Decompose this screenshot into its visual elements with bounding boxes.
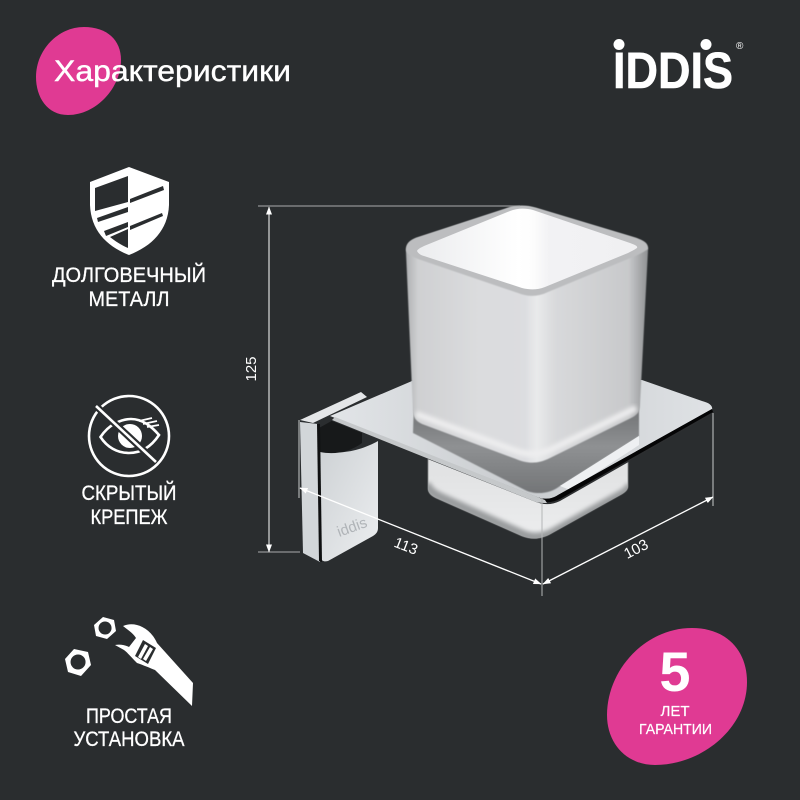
icon: nuts and wrench [65,617,193,706]
badge: 5 years warranty [607,628,747,765]
label: ПРОСТАЯ УСТАНОВКА: ПРОСТАЯ [86,705,172,728]
dimension: depth 103 [543,413,713,584]
label: ПРОСТАЯ УСТАНОВКА [74,705,184,751]
dimension: depth 103: 103 [621,536,651,563]
logo: IDDIS: IDDIS [613,42,733,99]
label: ДОЛГОВЕЧНЫЙ МЕТАЛЛ: МЕТАЛЛ [88,288,170,311]
glass interior [417,209,637,289]
product: wall mount [300,392,378,562]
glass bottom band [416,408,636,454]
icon: shield [90,167,169,255]
icon: crossed-out eye [89,396,169,476]
badge: 5 years warranty: 5 [659,640,691,703]
label: ДОЛГОВЕЧНЫЙ МЕТАЛЛ: ДОЛГОВЕЧНЫЙ [52,263,206,287]
label: ПРОСТАЯ УСТАНОВКА: УСТАНОВКА [74,728,184,751]
label: СКРЫТЫЙ КРЕПЕЖ: КРЕПЕЖ [90,506,168,529]
logo on mount: iddis [335,514,370,541]
dimension: height 125: 125 [243,356,260,382]
glass body [406,206,648,463]
product: chrome shelf [330,380,713,504]
glass rim [406,206,648,296]
badge: 5 years warranty: ЛЕТ [660,703,690,720]
heading: Характеристики with pink blob [36,27,291,115]
feature: easy installation [65,617,193,751]
heading: Характеристики with pink blob: Характеристики [54,55,291,88]
label: СКРЫТЫЙ КРЕПЕЖ [82,481,176,529]
dimension: width 113 [299,420,542,596]
feature: hidden fastening [82,396,176,529]
badge: 5 years warranty: ГАРАНТИИ [639,721,712,738]
dimension: width 113: 113 [392,534,420,559]
label: СКРЫТЫЙ КРЕПЕЖ: СКРЫТЫЙ [82,481,176,505]
product: frosted glass cup [406,206,648,463]
product: lower glass below shelf [426,455,630,538]
feature: durable metal [52,167,206,311]
logo: IDDIS: ® [736,41,744,52]
label: ДОЛГОВЕЧНЫЙ МЕТАЛЛ [52,263,206,311]
dimensions [243,206,713,596]
